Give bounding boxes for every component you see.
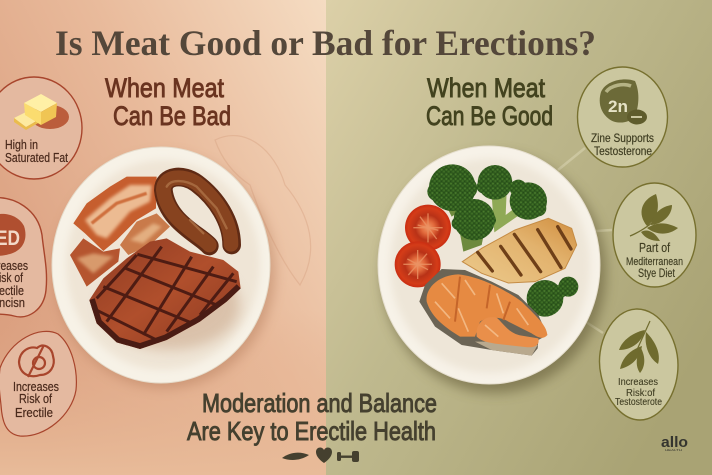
- badge: zinc supports testosterone: [578, 67, 668, 167]
- icon: leaves: [619, 321, 659, 373]
- heading: when meat can be bad: [105, 73, 231, 131]
- plate: [378, 146, 600, 384]
- badge: high in saturated fat: [0, 77, 82, 179]
- salmon steak: [419, 269, 547, 356]
- plate: good foods: [378, 146, 606, 393]
- badge text: Stye Diet: [638, 268, 676, 280]
- plate well: [390, 159, 590, 373]
- broccoli group: [427, 164, 578, 317]
- icon: zinc: 2n: [608, 97, 628, 116]
- logo: allo health: HEALTH: [665, 448, 682, 452]
- plate: [52, 147, 270, 383]
- badge: increases risk of testosterone: [599, 309, 678, 420]
- background: right olive panel: [326, 0, 712, 475]
- plate shadow: [382, 153, 606, 393]
- icon: olive branch: [630, 194, 678, 241]
- tomato slices: [395, 205, 451, 287]
- plate: bad foods: [52, 147, 275, 388]
- heading: when meat can be bad: When Meat: [105, 73, 224, 103]
- footer icons: leaf, heart, dumbbell: [282, 448, 359, 463]
- badge text: [13, 380, 59, 420]
- badge text: Testosterote: [615, 396, 662, 408]
- footer message: [187, 388, 437, 446]
- title: Is Meat Good or Bad for Erections?: [55, 23, 596, 63]
- bacon: [70, 177, 170, 287]
- badge text: Risk:of: [626, 387, 655, 399]
- food shadow: [100, 260, 240, 350]
- badge text: [626, 241, 683, 280]
- logo: allo health: allo: [661, 434, 688, 451]
- badge text: Increases: [13, 380, 59, 394]
- icon: crossed egg: [19, 345, 54, 377]
- badge text: [591, 131, 654, 158]
- badge outline: [0, 77, 82, 179]
- badge: part of mediterranean style diet: [613, 183, 696, 287]
- plate shadow: [55, 154, 275, 388]
- badge outline: [578, 67, 668, 167]
- badge text: Erectile: [15, 406, 53, 420]
- badge outline: [613, 183, 696, 287]
- background: left peach panel: [0, 0, 326, 475]
- food: bad items: [70, 177, 241, 349]
- footer message: Moderation and Balance: [202, 388, 437, 418]
- badge text: [0, 259, 28, 310]
- badge text: Mediterranean: [626, 256, 683, 268]
- steak: [89, 238, 241, 349]
- sausage: [163, 177, 232, 246]
- food: good items: [395, 164, 578, 356]
- badge: increases risk of erectile dysfunction: [0, 198, 47, 317]
- chicken breast: [462, 218, 577, 283]
- badge text: Part of: [639, 241, 670, 255]
- badge text: Testosterone: [594, 144, 652, 158]
- badge text: [5, 138, 68, 165]
- badge text: High in: [5, 138, 38, 152]
- heading: when meat can be good: Can Be Good: [426, 101, 553, 131]
- badge: increases risk of erectile: [0, 331, 76, 436]
- badge outline: [0, 331, 76, 436]
- footer message: Are Key to Erectile Health: [187, 416, 436, 446]
- badge text: Saturated Fat: [5, 151, 68, 165]
- badge outline: [0, 198, 47, 317]
- icon: butter: [14, 94, 69, 130]
- badge text: [615, 376, 662, 408]
- heading: when meat can be good: When Meat: [427, 73, 545, 103]
- heading: when meat can be good: [426, 73, 553, 131]
- badge text: Zine Supports: [591, 131, 654, 145]
- badge text: Increases: [618, 376, 658, 388]
- plate well: [66, 160, 260, 370]
- connector lines to badges: [558, 148, 612, 333]
- badge outline: [599, 309, 678, 420]
- badge text: Risk of: [19, 392, 52, 406]
- heading: when meat can be bad: Can Be Bad: [113, 101, 231, 131]
